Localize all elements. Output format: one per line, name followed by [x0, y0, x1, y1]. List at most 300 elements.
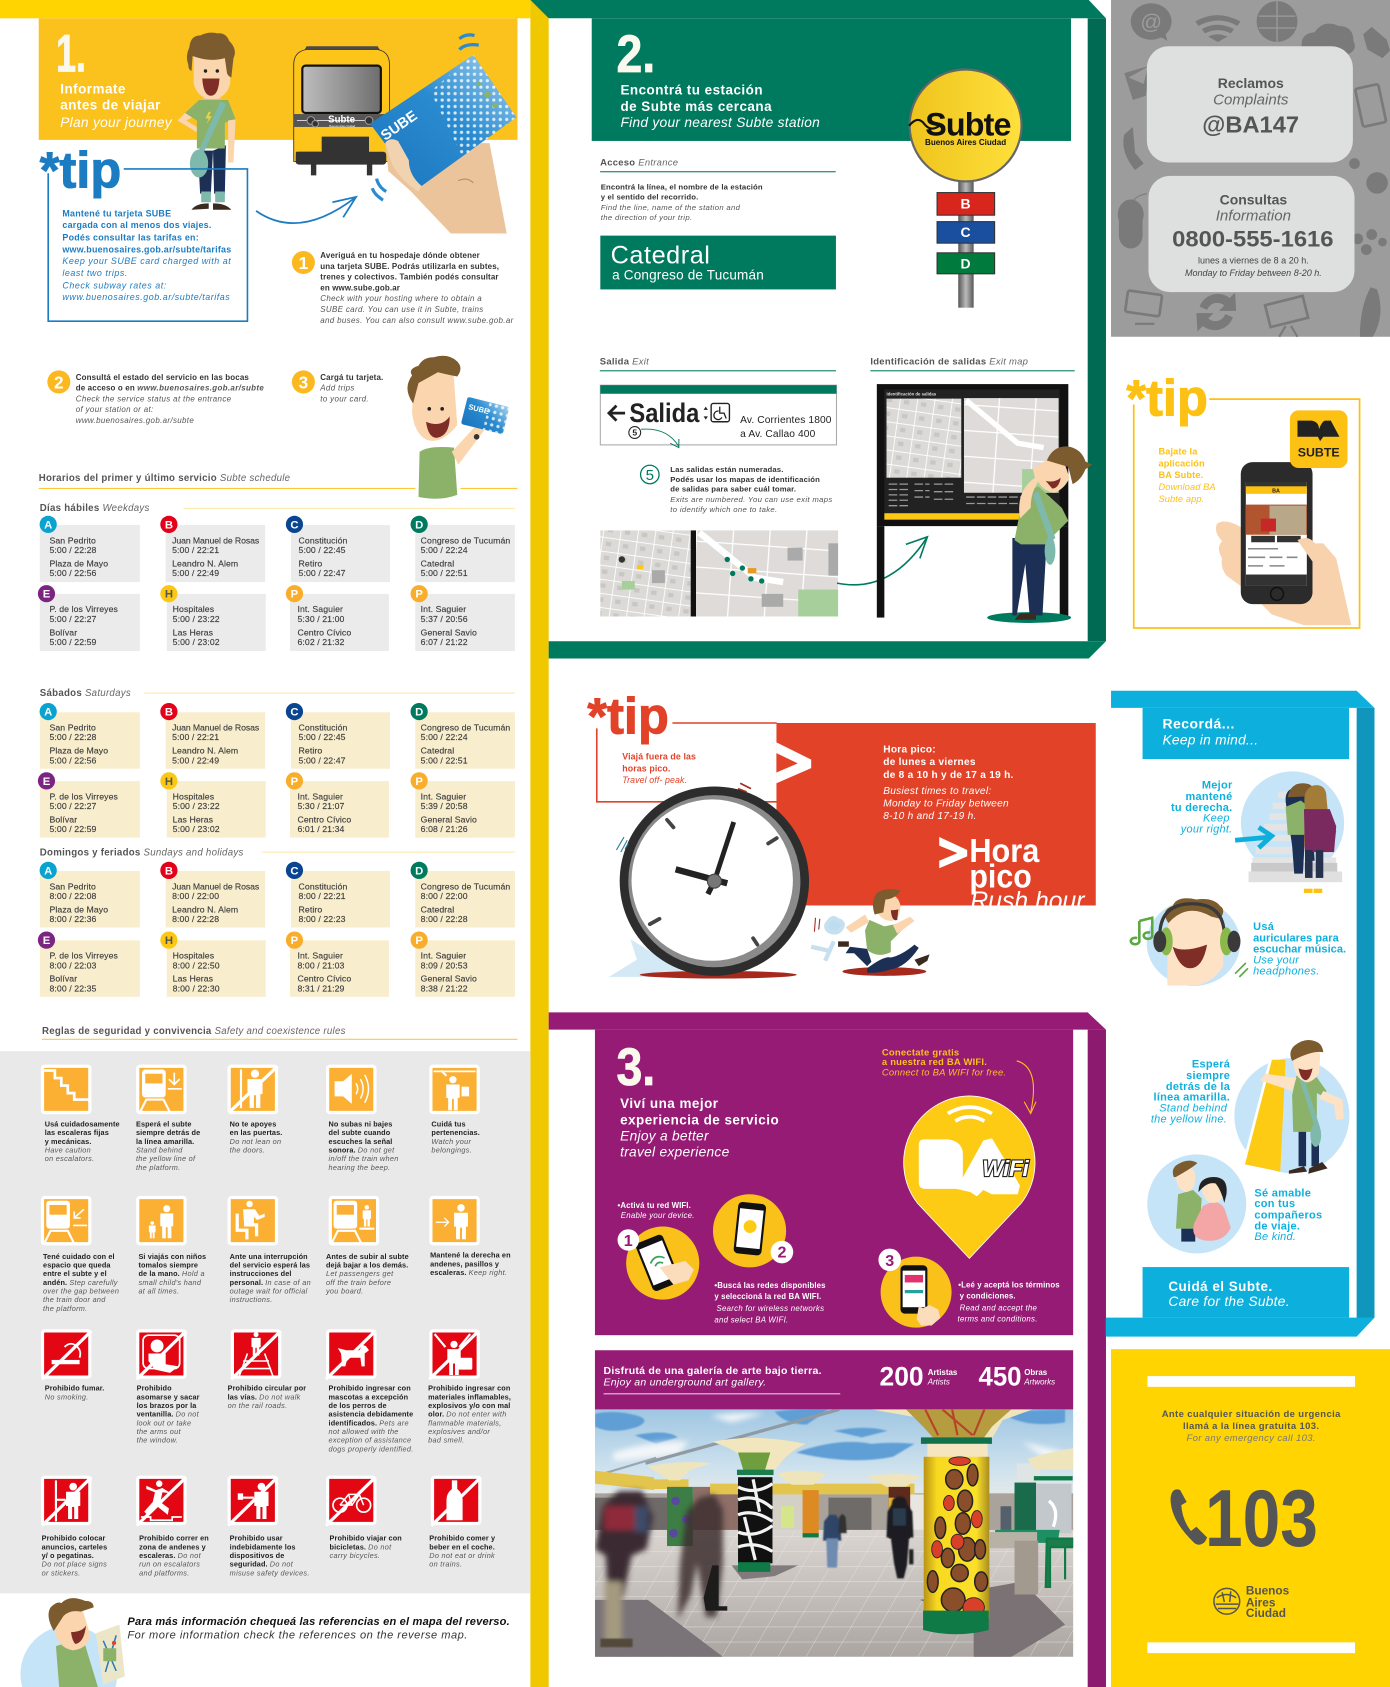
- illustration: Subte station sign: B: [961, 196, 971, 212]
- panel: keep in mind header: [1143, 708, 1349, 759]
- illustration: phone in hand: BA: [1272, 489, 1280, 495]
- line B: Juan Manuel de Rosas: [172, 881, 260, 891]
- rule: flammable: bad smell.: [428, 1436, 464, 1445]
- heading: schedule: Horarios del primer y último servicio Subte schedule: [39, 473, 291, 484]
- line B: Juan Manuel de Rosas: [172, 723, 260, 733]
- line E: Bolívar: [49, 974, 77, 984]
- rule: yellow line: [136, 1066, 200, 1172]
- rule: flammable: materiales inflamables,: [428, 1392, 511, 1401]
- line P General Savio: General Savio: [421, 627, 477, 637]
- line P Centro Civico: Int. Saguier: [297, 791, 343, 801]
- illustration: boy showing card: [407, 356, 509, 499]
- line P General Savio: General Savio: [421, 815, 477, 825]
- item: yellow line: detrás de la: [1166, 1081, 1231, 1093]
- rule: outage: [229, 1197, 311, 1304]
- block: exit: [600, 357, 838, 616]
- rule: eat and drink: on trains.: [429, 1560, 462, 1569]
- illustration: boy looking at map: [987, 446, 1092, 623]
- rule: posters: or stickers.: [42, 1568, 81, 1577]
- item: yellow line: Esperá: [1192, 1058, 1231, 1070]
- line C: 5:00 / 22:47: [299, 568, 346, 578]
- Catedral sign: a Congreso de Tucumán: [612, 268, 764, 283]
- rule: belongings: Watch your: [431, 1137, 471, 1146]
- rule: escalators: y mecánicas.: [45, 1137, 91, 1146]
- line E: 5:00 / 22:27: [49, 614, 97, 624]
- panel: art gallery header: Enjoy an underground art gallery.: [604, 1377, 766, 1389]
- step 1 item: Check with your hosting where to obtain a: [320, 294, 482, 303]
- item: keep right: your right.: [1180, 824, 1232, 836]
- item: headphones: escuchar música.: [1253, 943, 1346, 955]
- line P General Savio: [411, 932, 515, 997]
- step 2 item: Consultá el estado del servicio en las bocas: [76, 373, 249, 382]
- rule: eat and drink: beber en el coche.: [429, 1542, 495, 1551]
- tip text: aplicación: [1158, 458, 1205, 468]
- rule: let passengers off: off the train before: [326, 1278, 391, 1287]
- line D: 8:00 / 22:00: [421, 891, 468, 901]
- step 2 item: 2: [54, 372, 64, 392]
- illustration: clock: [609, 783, 820, 979]
- line P General Savio: 5:37 / 20:56: [421, 614, 468, 624]
- rule: running: zona de andenes y: [139, 1542, 207, 1551]
- heading: sundays: Domingos y feriados Sundays and holidays: [40, 847, 244, 858]
- rule: doors: the doors.: [230, 1145, 265, 1154]
- rule: posters: [42, 1477, 107, 1577]
- line C: [286, 862, 390, 928]
- rule: children: [138, 1197, 206, 1295]
- line H: [160, 772, 266, 838]
- arrow: wifi: [1017, 1061, 1036, 1114]
- rule: no smoking: [42, 1331, 104, 1401]
- heading: exit map: Identificación de salidas Exit map: [870, 357, 1028, 368]
- line P Centro Civico: Int. Saguier: [297, 604, 343, 614]
- line P Centro Civico: Centro Cívico: [297, 974, 351, 984]
- line P Centro Civico: [286, 585, 389, 651]
- line H: 5:00 / 23:22: [173, 614, 220, 624]
- tip logo: *tip: [587, 688, 669, 745]
- illustration: yellow subway train: [294, 46, 389, 175]
- heading: viví: Enjoy a better: [620, 1128, 710, 1143]
- line B: B: [165, 865, 173, 877]
- line P General Savio: Int. Saguier: [421, 951, 466, 961]
- heading: safety rules: Reglas de seguridad y convivencia Safety and coexistence rules: [42, 1026, 346, 1037]
- step: search networks: •Buscá las redes disponibles: [714, 1281, 826, 1290]
- heading: informate: Plan your journey: [60, 115, 173, 130]
- exit sign: Salida: [629, 398, 700, 428]
- item: be kind: de viaje.: [1254, 1221, 1300, 1233]
- line C: Retiro: [299, 558, 322, 568]
- heading: viví: experiencia de servicio: [620, 1112, 779, 1127]
- line H: Las Heras: [173, 815, 214, 825]
- rule: eat and drink: [429, 1477, 496, 1569]
- line A: A: [44, 706, 52, 718]
- line P Centro Civico: 6:01 / 21:34: [297, 824, 345, 834]
- rule: flammable: Prohibido ingresar con: [428, 1384, 510, 1393]
- rule: window: Prohibido: [137, 1384, 172, 1393]
- step 3 item: 3: [299, 372, 308, 392]
- rule: keep right: andenes, pasillos y: [430, 1259, 500, 1268]
- line D: Catedral: [421, 746, 454, 756]
- rule: let passengers off: [325, 1197, 409, 1295]
- tip text: www.buenosaires.gob.ar/subte/tarifas: [62, 292, 230, 302]
- line D: 5:00 / 22:51: [421, 568, 468, 578]
- line H: Las Heras: [173, 974, 214, 984]
- step 1 item: en www.sube.gob.ar: [320, 283, 400, 292]
- tip text: BA Subte.: [1158, 470, 1203, 480]
- panel: care for the subte: [1143, 1267, 1349, 1318]
- line E: [38, 932, 140, 997]
- rule: bicycles: bicicletas. Do not: [330, 1542, 391, 1551]
- exit sign: a Av. Callao 400: [740, 429, 816, 440]
- rule: escalators: Have caution: [45, 1145, 91, 1154]
- rush hour info: de 8 a 10 h y de 17 a 19 h.: [883, 770, 1014, 781]
- line C: C: [290, 865, 299, 877]
- item: headphones: [1131, 898, 1346, 986]
- line P General Savio: Int. Saguier: [421, 791, 466, 801]
- icons: communication pattern: [1118, 1, 1390, 337]
- step 1 item: una tarjeta SUBE. Podrás utilizarla en subtes,: [320, 262, 499, 271]
- item: be kind: compañeros: [1254, 1210, 1322, 1222]
- wifi callout: Conectate gratis: [882, 1047, 959, 1058]
- step 3 item: Add trips: [319, 384, 355, 393]
- item: yellow line: the yellow line.: [1151, 1114, 1227, 1126]
- illustration: yellow subway train: Subte: [328, 115, 356, 126]
- line P General Savio: 8:38 / 21:22: [421, 983, 468, 993]
- logo: Buenos Aires Ciudad: Ciudad: [1246, 1606, 1286, 1620]
- panel: care for the subte: Cuidá el Subte.: [1168, 1279, 1273, 1294]
- tip text: Podés consultar las tarifas en:: [62, 232, 199, 242]
- rule: flammable: [428, 1331, 511, 1445]
- item: keep right: tu derecha.: [1171, 802, 1232, 814]
- line B: 5:00 / 22:21: [172, 545, 219, 555]
- heading: encontrá: de Subte más cercana: [620, 99, 772, 114]
- line D: D: [415, 706, 423, 718]
- stat: artworks: 450: [978, 1362, 1022, 1392]
- item: headphones: auriculares para: [1253, 932, 1340, 944]
- rush hour title: pico: [969, 859, 1032, 896]
- tip logo: *tip: [40, 142, 121, 199]
- rule: running: and platforms.: [139, 1568, 190, 1577]
- rule: keep right: Mantené la derecha en: [430, 1251, 511, 1260]
- rule: yellow line: siempre detrás de: [136, 1128, 200, 1137]
- rule: running: run on escalators: [139, 1560, 200, 1569]
- rule: rail roads: Prohibido circular por: [228, 1384, 306, 1393]
- line A: 8:00 / 22:08: [49, 891, 97, 901]
- line B: 5:00 / 22:49: [172, 568, 219, 578]
- card: complaints: [1147, 46, 1353, 162]
- rule: let passengers off: you board.: [325, 1286, 363, 1295]
- rule: rail roads: las vías. Do not walk: [228, 1392, 301, 1401]
- rush hour info: 8-10 h and 17-19 h.: [883, 811, 977, 822]
- rule: gap: Tené cuidado con el: [43, 1252, 115, 1261]
- schedule: sundays: [38, 862, 515, 997]
- line P General Savio: Int. Saguier: [421, 604, 466, 614]
- line H: H: [165, 935, 173, 947]
- rule: gap: andén. Step carefully: [43, 1278, 118, 1287]
- rule: outage: del servicio esperá las: [230, 1260, 310, 1269]
- illustration: boy showing card: SUBE: [467, 402, 490, 416]
- line P General Savio: [411, 585, 515, 651]
- rule: safety devices: misuse safety devices.: [230, 1568, 310, 1577]
- rule: belongings: pertenencias.: [431, 1128, 480, 1137]
- icon: BA Subte app: SUBTE: [1298, 446, 1340, 460]
- line B: Leandro N. Alem: [172, 558, 238, 568]
- line B: Leandro N. Alem: [172, 904, 238, 914]
- tip text: Check subway rates at:: [62, 280, 167, 290]
- tip box: BA Subte app: [1126, 369, 1360, 628]
- rule: gap: espacio que queda: [43, 1260, 111, 1269]
- line D: [411, 703, 515, 769]
- rule: safety devices: Prohibido usar: [230, 1534, 283, 1543]
- line D: Congreso de Tucumán: [421, 723, 510, 733]
- tip box: SUBE card: [40, 142, 247, 321]
- logo: Buenos Aires Ciudad: Buenos: [1246, 1583, 1290, 1597]
- panel: step 3 header: [595, 1030, 1073, 1335]
- line H: Hospitales: [173, 604, 215, 614]
- step 2 item: of your station or at:: [76, 405, 154, 414]
- line B: Juan Manuel de Rosas: [172, 535, 260, 545]
- illustration: boy with bag: [178, 33, 236, 210]
- line P Centro Civico: 8:00 / 21:03: [297, 960, 345, 970]
- block: entrance: Acceso Entrance: [600, 158, 678, 169]
- step: search networks: y seleccioná la red BA WIFI.: [714, 1292, 821, 1301]
- step 2 item: de acceso o en www.buenosaires.gob.ar/subte: [76, 384, 264, 393]
- line P General Savio: [411, 772, 515, 838]
- line P Centro Civico: 5:30 / 21:00: [297, 614, 345, 624]
- tip panel: rush hour: [587, 688, 1096, 915]
- schedule: weekdays: [38, 516, 515, 651]
- rule: outage: instructions.: [230, 1295, 273, 1304]
- line H: H: [165, 589, 173, 601]
- item: yellow line: línea amarilla.: [1154, 1092, 1230, 1104]
- step 2 item: Check the service status at the entrance: [76, 394, 232, 403]
- rule: pets: de los perros de: [329, 1401, 387, 1410]
- rush hour title: Hora: [969, 833, 1040, 870]
- icon: BA Subte app: [1290, 410, 1348, 468]
- line C: Constitución: [299, 723, 348, 733]
- line D: [411, 516, 515, 582]
- card: complaints: Reclamos: [1218, 75, 1284, 91]
- step 3 item: [292, 370, 383, 403]
- illustration: running boy: [811, 889, 930, 976]
- line C: Constitución: [299, 535, 348, 545]
- line E: Bolívar: [49, 815, 77, 825]
- line B: 5:00 / 22:49: [172, 755, 219, 765]
- line C: 5:00 / 22:45: [299, 545, 346, 555]
- line E: P. de los Virreyes: [49, 604, 119, 614]
- line D: Congreso de Tucumán: [421, 535, 510, 545]
- stat: artists: [880, 1362, 958, 1392]
- item: keep right: Keep: [1203, 813, 1230, 825]
- line D: Catedral: [421, 904, 454, 914]
- line H: Hospitales: [173, 951, 215, 961]
- tip text: Travel off- peak.: [622, 775, 687, 785]
- illustration: exit map board: [877, 384, 1068, 618]
- heading: informate: Informate: [60, 82, 126, 97]
- footer note: Para más información chequeá las referencias en el mapa del reverso.: [127, 1616, 510, 1628]
- step 3 item: Cargá tu tarjeta.: [320, 373, 383, 382]
- rule: belongings: Cuidá tus: [431, 1119, 466, 1128]
- line A: San Pedrito: [49, 723, 96, 733]
- heading: encontrá: Find your nearest Subte station: [620, 115, 820, 130]
- stat: artists: Artistas: [928, 1368, 958, 1377]
- line A: [40, 516, 140, 582]
- tip text: Download BA: [1158, 482, 1216, 492]
- rule: sound signal: [328, 1066, 399, 1172]
- item: headphones: Use your: [1253, 954, 1300, 966]
- step: accept terms: y condiciones.: [960, 1292, 1016, 1301]
- line A: San Pedrito: [49, 535, 96, 545]
- line P Centro Civico: 6:02 / 21:32: [297, 637, 345, 647]
- line D: Congreso de Tucumán: [421, 881, 510, 891]
- step: accept terms: Read and accept the: [960, 1303, 1038, 1312]
- maps: [600, 530, 838, 616]
- rule: sound signal: hearing the beep.: [329, 1163, 390, 1172]
- item: be kind: con tus: [1254, 1198, 1295, 1210]
- line P General Savio: 5:39 / 20:58: [421, 801, 468, 811]
- heading: informate: antes de viajar: [60, 98, 161, 113]
- item: yellow line: Stand behind: [1159, 1102, 1228, 1114]
- line P Centro Civico: Centro Cívico: [297, 815, 351, 825]
- heading: weekdays: Días hábiles Weekdays: [40, 503, 150, 514]
- illustration: Subte station sign: C: [961, 224, 971, 240]
- line P General Savio: 6:08 / 21:26: [421, 824, 468, 834]
- illustration: yellow subway train: Buenos Aires Ciudad: [329, 124, 356, 128]
- line C: Constitución: [299, 881, 348, 891]
- exit explanation: Las salidas están numeradas.: [670, 465, 784, 474]
- step: enable device: 1: [624, 1232, 633, 1250]
- line E: [38, 772, 140, 838]
- stat: artworks: Obras: [1024, 1368, 1048, 1377]
- rule: gap: the platform.: [43, 1304, 88, 1313]
- icon: BA wifi pin: WiFi: [982, 1156, 1029, 1181]
- line A: Plaza de Mayo: [49, 558, 108, 568]
- rule: pets: exception of assistance: [329, 1436, 411, 1445]
- icon: BA wifi pin: [904, 1096, 1035, 1258]
- exit explanation: to identify which one to take.: [670, 505, 778, 514]
- rule: gap: entre el subte y el: [43, 1269, 107, 1278]
- rule: window: los brazos por la: [137, 1401, 197, 1410]
- step: search networks: [713, 1194, 826, 1324]
- tip text: www.buenosaires.gob.ar/subte/tarifas: [61, 244, 231, 254]
- stat: artworks: [978, 1362, 1055, 1392]
- heading: viví: travel experience: [620, 1145, 730, 1160]
- line D: Catedral: [421, 558, 454, 568]
- card: complaints: @BA147: [1202, 111, 1299, 137]
- rule: let passengers off: Antes de subir al subte: [326, 1252, 409, 1261]
- line D: D: [415, 519, 423, 531]
- Catedral sign: Catedral: [611, 242, 710, 270]
- exit sign: [600, 385, 836, 445]
- rule: let passengers off: Let passengers get: [326, 1269, 394, 1278]
- rule: belongings: belongings.: [431, 1145, 472, 1154]
- exit explanation: Exits are numbered. You can use exit maps: [670, 495, 833, 504]
- rule: pets: not allowed with the: [329, 1427, 399, 1436]
- line D: 8:00 / 22:28: [421, 914, 468, 924]
- step 1 item: Averiguá en tu hospedaje dónde obtener: [320, 251, 480, 260]
- rule: running: Prohibido correr en: [139, 1534, 209, 1543]
- rule: sound signal: del subte cuando: [329, 1128, 391, 1137]
- step: accept terms: 3: [885, 1252, 894, 1270]
- rule: pets: Prohibido ingresar con: [329, 1384, 411, 1393]
- line C: 8:00 / 22:23: [299, 914, 346, 924]
- line P Centro Civico: Int. Saguier: [297, 951, 343, 961]
- icon: contactless waves: [372, 35, 479, 200]
- line P Centro Civico: P: [291, 589, 299, 601]
- rule: sound signal: in/off the train when: [329, 1154, 399, 1163]
- rule: window: ventanilla. Do not: [137, 1410, 199, 1419]
- rule: keep right: escaleras. Keep right.: [430, 1268, 507, 1277]
- step number 2: 2.: [616, 25, 655, 84]
- step 1 item: [292, 251, 514, 325]
- line E: 5:00 / 22:27: [49, 801, 97, 811]
- rule: children: Si viajás con niños: [138, 1252, 206, 1261]
- rule: escalators: Usá cuidadosamente: [45, 1119, 120, 1128]
- panel: care for the subte: Care for the Subte.: [1168, 1294, 1290, 1309]
- rule: running: escaleras. Do not: [139, 1551, 201, 1560]
- line H: 5:00 / 23:02: [173, 824, 220, 834]
- line D: [411, 862, 515, 928]
- rule: keep right: [430, 1197, 511, 1277]
- line C: C: [290, 706, 299, 718]
- item: be kind: [1147, 1154, 1322, 1253]
- line C: Retiro: [299, 904, 322, 914]
- line D: D: [415, 865, 423, 877]
- stat: artists: 200: [880, 1362, 924, 1392]
- exit explanation: de salidas para saber cuál tomar.: [670, 485, 796, 494]
- tip text: Mantené tu tarjeta SUBE: [62, 208, 171, 218]
- illustration: Subte station sign: [909, 70, 1022, 308]
- panel: complaints background: [1111, 0, 1390, 337]
- rule: bicycles: [326, 1477, 402, 1560]
- panel: art gallery header: Disfrutá de una galería de arte bajo tierra.: [604, 1365, 822, 1377]
- logo: Buenos Aires Ciudad: Aires: [1246, 1595, 1276, 1609]
- rule: safety devices: dispositivos de: [230, 1551, 284, 1560]
- exit explanation: Podés usar los mapas de identificación: [670, 475, 820, 484]
- rule: sound signal: escuches la señal: [329, 1137, 392, 1146]
- panel: keep in mind header: Keep in mind...: [1162, 733, 1258, 748]
- wifi callout: Connect to BA WIFI for free.: [882, 1067, 1006, 1078]
- line P General Savio: P: [415, 935, 423, 947]
- line A: 8:00 / 22:36: [49, 914, 97, 924]
- line E: 5:00 / 22:59: [49, 824, 97, 834]
- illustration: hand holding SUBE card: SUBE: [378, 108, 421, 144]
- panel: step 3 frame: [549, 1012, 1106, 1687]
- rule: pets: identificados. Pets are: [329, 1418, 409, 1427]
- rule: posters: y/ o pegatinas.: [42, 1551, 94, 1560]
- line P Centro Civico: 8:31 / 21:29: [297, 983, 345, 993]
- step: search networks: Search for wireless networks: [717, 1304, 824, 1313]
- arrow: exit number: [641, 429, 679, 448]
- line P General Savio: 6:07 / 21:22: [421, 637, 468, 647]
- rule: doors: No te apoyes: [230, 1119, 276, 1128]
- logo: Buenos Aires Ciudad: [1214, 1583, 1290, 1620]
- rule: yellow line: la línea amarilla.: [136, 1137, 194, 1146]
- rule: pets: asistencia debidamente: [329, 1410, 413, 1419]
- rule: posters: Do not place signs: [42, 1560, 107, 1569]
- rush hour info: de lunes a viernes: [883, 757, 976, 768]
- wifi callout: a nuestra red BA WIFI.: [882, 1057, 987, 1068]
- rule: flammable: flammable materials,: [428, 1418, 502, 1427]
- rush hour title: [939, 833, 1086, 915]
- card: information: Information: [1216, 208, 1291, 225]
- block: entrance: [600, 158, 836, 289]
- step 1 item: trenes y colectivos. También podés consultar: [320, 273, 499, 282]
- exit explanation: 5: [646, 467, 654, 484]
- rule: running: [137, 1477, 209, 1577]
- step: search networks: 2: [777, 1244, 786, 1262]
- stat: artworks: Artworks: [1023, 1378, 1055, 1387]
- line A: A: [44, 519, 52, 531]
